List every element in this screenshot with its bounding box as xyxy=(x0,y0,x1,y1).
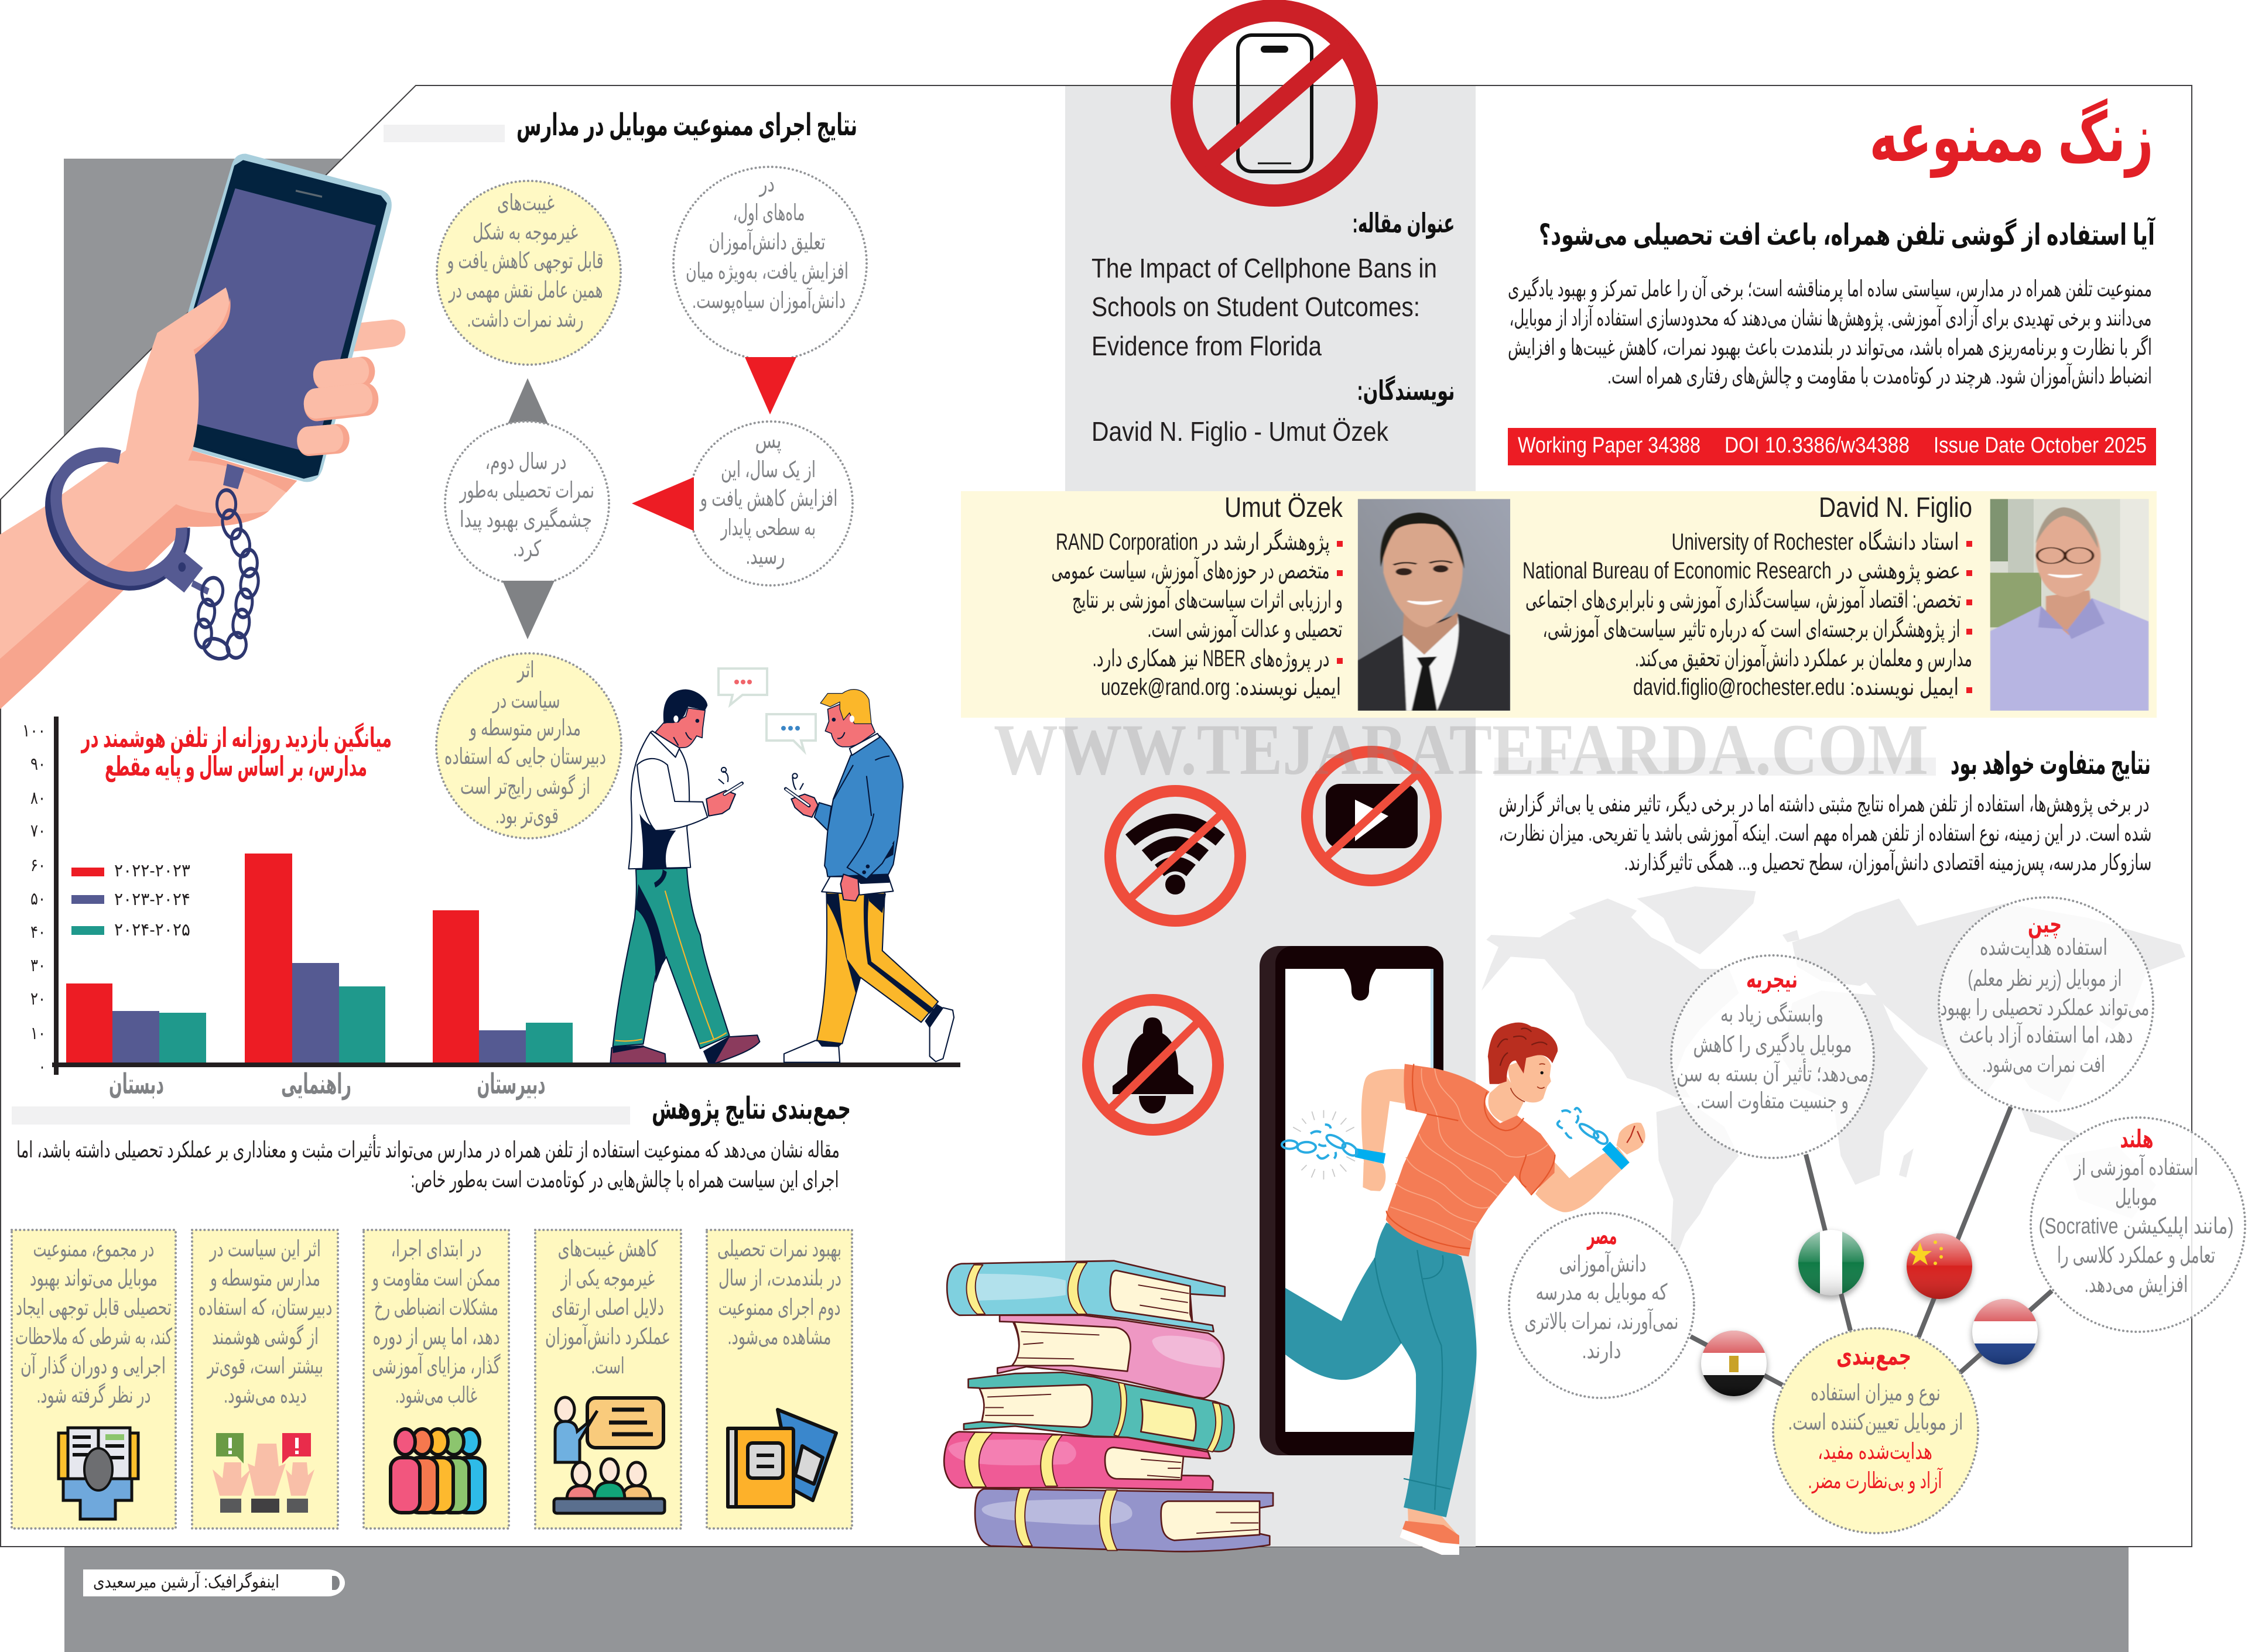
y axis labels: ۰ xyxy=(39,1057,46,1077)
body xyxy=(1282,1023,1645,1517)
bubble: policy effect: از گوشی رایج‌تر است xyxy=(460,773,590,800)
panel: author profiles xyxy=(961,491,2157,718)
connector lines to flags xyxy=(1691,1107,2052,1385)
text block: differing results paragraph xyxy=(1499,791,2151,876)
y axis labels: ۶۰ xyxy=(30,856,46,875)
top-left grey block xyxy=(64,159,343,436)
bubble: Netherlands: افزایش می‌دهد. xyxy=(2085,1273,2188,1298)
icon: teacher and students xyxy=(554,1397,665,1513)
icon: books xyxy=(728,1410,836,1507)
arrow: grey down xyxy=(502,581,555,639)
bubble: conclusion: جمع‌بندی xyxy=(1836,1342,1911,1371)
author: David Figlio: David N. Figlio xyxy=(1819,492,1972,523)
panel: card grades xyxy=(707,1230,852,1528)
panel: card policy effect: دبیرستان، که استفاده xyxy=(198,1295,333,1321)
panel: card early resistance: گذار، مزایای آموزشی xyxy=(372,1352,501,1379)
bubble: conclusion: آزاد و بی‌نظارت مضر. xyxy=(1808,1467,1942,1494)
speech bubble: blue dots xyxy=(767,714,816,751)
author: David Figlio: ایمیل نویسنده: david.figlio@rochester.edu xyxy=(1633,674,1959,701)
y axis labels: ۲۰ xyxy=(30,989,46,1009)
book: blue xyxy=(947,1261,1225,1332)
bubble: absences xyxy=(437,181,621,365)
chart: daily smartphone visits xyxy=(22,717,960,1101)
panel: card absences: دلایل اصلی ارتقای xyxy=(552,1295,664,1320)
bubble: policy effect: قوی‌تر بود. xyxy=(495,804,559,829)
y axis labels: ۸۰ xyxy=(30,789,46,808)
bubble: Egypt: دانش‌آموزانی xyxy=(1559,1250,1647,1277)
bubble: Nigeria xyxy=(1671,955,1874,1158)
text block: article title: Evidence from Florida xyxy=(1092,331,1322,361)
panel: card absences: عملکرد دانش‌آموزان xyxy=(545,1323,670,1350)
text block: summary paragraph xyxy=(16,1135,840,1193)
bubble: first months: دانش‌آموزان سیاه‌پوست. xyxy=(692,287,846,314)
legend: ۲۰۲۳-۲۰۲۴ xyxy=(114,890,190,909)
bubble: conclusion: هدایت‌شده مفید، xyxy=(1818,1439,1932,1464)
panel: card grades: بهبود نمرات تحصیلی xyxy=(717,1237,841,1262)
bubble: Egypt: دارند. xyxy=(1582,1339,1621,1363)
photo: David Figlio xyxy=(1990,499,2148,711)
legend: ۲۰۲۴-۲۰۲۵ xyxy=(114,920,190,940)
heading: research summary: جمع‌بندی نتایج پژوهش xyxy=(652,1092,851,1126)
bubble: Netherlands: استفاده آموزشی از xyxy=(2074,1154,2198,1181)
bubble: China: دهد، اما استفاده آزاد باعث xyxy=(1959,1022,2133,1048)
panel: card policy effect: اثر این سیاست در xyxy=(209,1237,321,1262)
y axis labels: ۴۰ xyxy=(30,923,46,942)
chart title: میانگین بازدید روزانه از تلفن هوشمند در xyxy=(81,722,392,753)
author: Umut Ozek: و ارزیابی اثرات سیاست‌های آموزشی بر نتایج xyxy=(1072,585,1343,613)
panel: card overall xyxy=(12,1230,176,1528)
heading: results of phone ban xyxy=(384,108,857,143)
legend: ۲۰۲۲-۲۰۲۳ xyxy=(114,861,190,880)
icon: person reading xyxy=(59,1428,138,1519)
bubble: China xyxy=(1939,897,2153,1112)
panel: card early resistance: مشکلات انضباطی رخ xyxy=(374,1295,498,1320)
panel: card overall: کند، به شرطی که ملاحظات xyxy=(15,1325,173,1350)
author: Umut Ozek: ایمیل نویسنده: uozek@rand.org xyxy=(1101,674,1341,701)
panel: card overall: اجرایی و دوران گذار آن xyxy=(20,1352,166,1379)
author: David Figlio: تخصص: اقتصاد آموزش، سیاست‌گذاری آموزشی و نابرابری‌های اجتماعی xyxy=(1525,585,1961,613)
heading: results will differ xyxy=(1494,747,2151,782)
bubble: Egypt xyxy=(1509,1213,1694,1398)
icon: no video xyxy=(1307,752,1436,880)
bubble: absences: غیبت‌های xyxy=(497,191,555,215)
author: David Figlio: استاد دانشگاه University of Rochester xyxy=(1671,529,1959,555)
bubble: Nigeria: وابستگی زیاد به xyxy=(1720,1001,1823,1027)
bubble: Nigeria: می‌دهد؛ تأثیر آن بسته به سن xyxy=(1676,1058,1869,1087)
credit pill: اینفوگرافیک: آرشین میرسعیدی xyxy=(93,1571,279,1592)
watermark: WWW.TEJARATEFARDA.COM xyxy=(994,710,1928,790)
bars: high school xyxy=(433,910,573,1063)
category labels: دبستان xyxy=(109,1069,164,1100)
y axis labels: ۹۰ xyxy=(30,755,46,774)
bubble: after one year: رسید. xyxy=(746,544,785,569)
bubble: first months xyxy=(673,167,867,360)
author: Umut Ozek: در پروژه‌های NBER نیز همکاری دارد. xyxy=(1093,646,1329,672)
text block: authors xyxy=(1092,375,1455,447)
author: Umut Ozek: متخصص در حوزه‌های آموزش، سیاست عمومی xyxy=(1052,556,1329,584)
bubble: first months: افزایش یافت، به‌ویژه میان xyxy=(686,259,848,285)
credit pill xyxy=(83,1569,345,1596)
text block: article title xyxy=(1092,208,1455,361)
icon: no wifi xyxy=(1110,791,1240,921)
bubble: Nigeria: موبایل یادگیری را کاهش xyxy=(1693,1031,1852,1058)
red info bar: Issue Date October 2025 xyxy=(1934,433,2147,458)
bubble: China: افت نمرات می‌شود. xyxy=(1982,1053,2105,1078)
heading: research summary xyxy=(12,1092,851,1126)
bubble: after one year: افزایش کاهش یافت و xyxy=(699,486,837,512)
chart title: مدارس، بر اساس سال و پایه مقطع xyxy=(105,751,367,783)
bubble: absences: رشد نمرات داشت. xyxy=(467,307,583,333)
author: David Figlio xyxy=(1522,492,1972,701)
bubble: Egypt: که موبایل به مدرسه xyxy=(1535,1280,1668,1305)
illustration: stacked books xyxy=(944,1261,1273,1551)
shoe xyxy=(1400,1507,1459,1555)
text block: summary paragraph: مقاله نشان می‌دهد که ممنوعیت استفاده از تلفن همراه در مدارس می‌تواند تأثیرات مثبت و معناداری بر عملکرد تحصیلی داشته باشد، اما xyxy=(16,1135,840,1163)
text block: article title: عنوان مقاله: xyxy=(1353,208,1455,239)
bubble: absences: غیرموجه به شکل xyxy=(473,220,578,245)
bubble: after one year: از یک سال، این xyxy=(721,458,816,483)
photo: Umut Ozek xyxy=(1358,499,1510,711)
text block: article title: The Impact of Cellphone Bans in xyxy=(1092,253,1437,283)
author: Umut Ozek: Umut Özek xyxy=(1224,492,1343,523)
bubble: conclusion xyxy=(1773,1328,1978,1533)
author: Umut Ozek: تحصیلی و عدالت آموزشی است. xyxy=(1148,615,1342,643)
text block: article title: Schools on Student Outcomes: xyxy=(1092,292,1420,322)
flag: China xyxy=(1906,1233,1973,1303)
y axis labels: ۷۰ xyxy=(30,821,46,841)
bubble: absences: همین عامل نقش مهمی در xyxy=(448,278,603,303)
icon: row of people xyxy=(391,1429,485,1513)
panel: card overall: در مجموع، ممنوعیت xyxy=(33,1237,155,1262)
bubble: policy effect xyxy=(436,653,621,838)
panel: card absences: است. xyxy=(591,1354,624,1379)
bubble: second year: کرد. xyxy=(513,537,542,562)
author: David Figlio: عضو پژوهشی در National Bureau of Economic Research xyxy=(1522,558,1960,584)
bubble: Netherlands: هلند xyxy=(2120,1125,2154,1153)
heading: results of phone ban: نتایج اجرای ممنوعیت موبایل در مدارس xyxy=(516,108,857,143)
flag: Nigeria xyxy=(1798,1230,1864,1299)
bubble: first months: تعلیق دانش‌آموزان xyxy=(709,228,826,255)
bubble: China: می‌تواند عملکرد تحصیلی را بهبود xyxy=(1941,996,2149,1021)
author: David Figlio: مدارس و معلمان بر عملکرد دانش‌آموزان تحقیق می‌کند. xyxy=(1635,644,1972,672)
author: Umut Ozek: پژوهشگر ارشد در RAND Corporation xyxy=(1056,529,1330,556)
bubble: after one year: پس xyxy=(755,429,781,453)
icon: no bell xyxy=(1088,1000,1218,1130)
icon: no phone sign xyxy=(1182,11,1367,196)
panel: card policy effect: مدارس متوسطه و xyxy=(210,1266,320,1291)
arrow: red down xyxy=(745,357,796,414)
bubble: policy effect: مدارس متوسطه و xyxy=(469,716,581,741)
y axis labels: ۱۰۰ xyxy=(22,721,46,741)
panel: card overall: در نظر گرفته شود. xyxy=(36,1382,151,1408)
bubble: China: استفاده هدایت‌شده xyxy=(1980,935,2107,960)
axes xyxy=(52,717,960,1075)
author: Umut Ozek xyxy=(1052,492,1343,701)
panel: card absences xyxy=(535,1230,681,1528)
book: pink xyxy=(997,1315,1224,1398)
panel: card early resistance: ممکن است مقاومت و xyxy=(371,1266,500,1291)
arrow: red left xyxy=(632,477,694,531)
bubble: China: از موبایل (زیر نظر معلم) xyxy=(1968,966,2122,992)
red info bar: DOI 10.3386/w34388 xyxy=(1725,433,1910,458)
illustration: man with green trousers using phone xyxy=(610,689,759,1063)
bubble: Egypt: نمی‌آورند، نمرات بالاتری xyxy=(1525,1308,1678,1335)
bubble: policy effect: سیاست در xyxy=(492,688,560,713)
icon: raised hands xyxy=(213,1433,314,1513)
bubble: Nigeria: نیجریه xyxy=(1746,965,1798,994)
bubble: Egypt: مصر xyxy=(1586,1222,1617,1250)
y axis labels: ۳۰ xyxy=(30,956,46,975)
panel: card grades: در بلندمدت، از سال xyxy=(718,1266,841,1291)
bubble: conclusion: از موبایل تعیین‌کننده است. xyxy=(1788,1410,1963,1435)
legend xyxy=(71,861,190,940)
bubble: absences: قابل توجهی کاهش یافت و xyxy=(446,249,603,274)
category labels: دبیرستان xyxy=(477,1069,546,1101)
illustration: hand holding phone with handcuff xyxy=(0,154,405,709)
flag: Netherlands xyxy=(1972,1299,2038,1368)
arrow: grey up xyxy=(508,378,548,424)
book: teal xyxy=(964,1372,1234,1452)
book: magenta xyxy=(944,1432,1213,1490)
text block: intro paragraph xyxy=(1508,275,2152,389)
bubble: policy effect: دبیرستان جایی که استفاده xyxy=(444,745,606,770)
panel: card overall: تحصیلی قابل توجهی ایجاد xyxy=(16,1295,172,1321)
bubble: second year: در سال دوم، xyxy=(485,450,567,475)
panel: card early resistance: در ابتدای اجرا، xyxy=(391,1237,481,1262)
bars: middle school xyxy=(245,854,385,1063)
bubble: first months: ماه‌های اول، xyxy=(733,201,805,226)
panel: card overall: موبایل می‌تواند بهبود xyxy=(30,1266,158,1291)
world map xyxy=(1481,886,2185,1253)
category labels: راهنمایی xyxy=(281,1069,351,1101)
bubble: Nigeria: و جنسیت متفاوت است. xyxy=(1696,1089,1849,1114)
y axis labels: ۱۰ xyxy=(30,1024,46,1043)
illustration: big phone xyxy=(1260,946,1443,1455)
panel: card absences: کاهش غیبت‌های xyxy=(557,1237,658,1262)
red info bar xyxy=(1508,428,2156,465)
panel: card absences: غیرموجه یکی از xyxy=(560,1266,655,1291)
bubble: Netherlands: موبایل xyxy=(2115,1185,2157,1211)
panel: card grades: مشاهده می‌شود. xyxy=(727,1325,832,1350)
bubble: second year: چشمگیری بهبود پیدا xyxy=(460,506,592,533)
bubble: after one year xyxy=(689,421,853,585)
author: David Figlio: از پژوهشگران برجسته‌ای است که درباره تاثیر سیاست‌های آموزشی، xyxy=(1542,615,1960,643)
panel: card policy effect xyxy=(192,1230,338,1528)
y axis labels: ۵۰ xyxy=(30,889,46,909)
panel: card grades: دوم اجرای ممنوعیت xyxy=(718,1295,841,1321)
panel: card policy effect: دیده می‌شود. xyxy=(224,1383,307,1408)
panel: card policy effect: از گوشی هوشمند xyxy=(212,1324,319,1350)
category labels xyxy=(109,1069,546,1101)
text block: authors: David N. Figlio - Umut Özek xyxy=(1092,416,1389,447)
bubble: China: چین xyxy=(2028,910,2062,939)
bubble: conclusion: نوع و میزان استفاده xyxy=(1811,1381,1941,1406)
bubble: after one year: به سطحی پایدار xyxy=(720,516,816,540)
bottom grey band xyxy=(64,1547,2129,1652)
text block: authors: نویسندگان: xyxy=(1357,375,1455,406)
panel: card early resistance: غالب می‌شود. xyxy=(395,1383,477,1408)
panel: card early resistance xyxy=(364,1230,509,1528)
bubble: policy effect: اثر xyxy=(516,658,534,683)
text block: summary paragraph: اجرای این سیاست همراه با چالش‌هایی در کوتاه‌مدت است به‌طور خاص: xyxy=(411,1168,839,1193)
book: purple xyxy=(975,1488,1273,1551)
panel: card policy effect: بیشتر است، قوی‌تر xyxy=(207,1354,323,1379)
bubble: first months: در xyxy=(759,172,775,197)
red info bar: Working Paper 34388 xyxy=(1518,433,1700,458)
y axis labels xyxy=(22,721,46,1077)
illustration: man with yellow trousers using phone xyxy=(784,690,954,1063)
illustration: running man xyxy=(1282,1023,1645,1555)
bars: elementary xyxy=(66,983,206,1063)
centre grey column xyxy=(1065,86,1476,1547)
flag: Egypt xyxy=(1700,1331,1767,1400)
panel: card early resistance: دهد، اما پس از دوره xyxy=(372,1325,500,1350)
speech bubble: red dots xyxy=(718,669,767,705)
bubble: second year: نمرات تحصیلی به‌طور xyxy=(459,478,594,503)
bubble: second year xyxy=(445,421,609,585)
chart title xyxy=(81,722,392,783)
bubble: Netherlands xyxy=(2031,1118,2245,1332)
